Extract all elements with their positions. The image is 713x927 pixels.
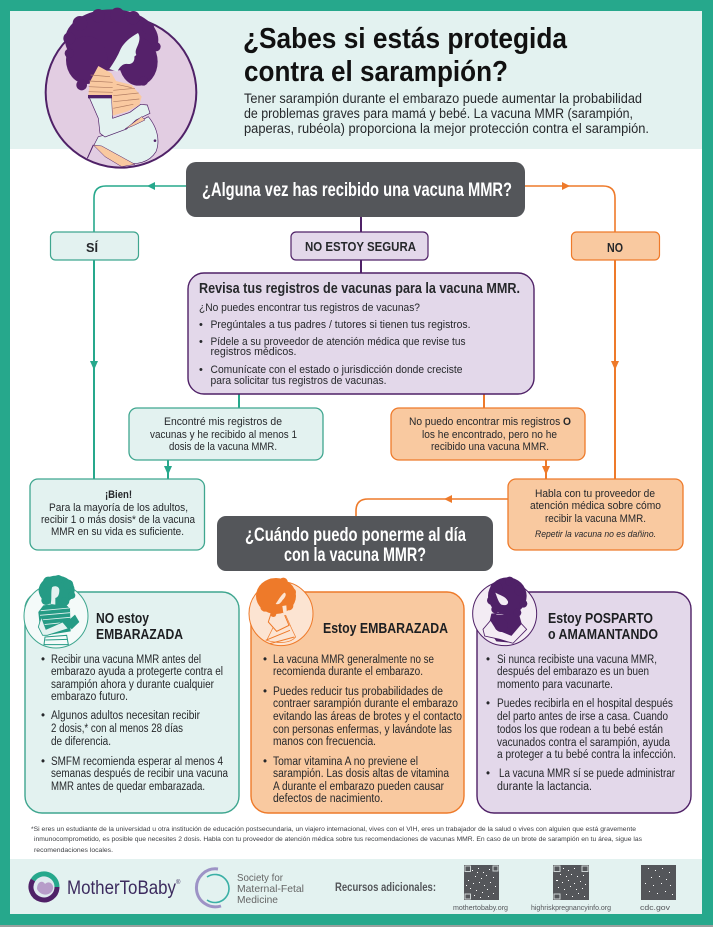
box: habla con tu proveedor <box>508 479 683 550</box>
panel: estoy embarazada: con personas enfermas, y lavándote las <box>273 724 452 736</box>
panel: no estoy embarazada: • <box>41 756 45 768</box>
answer: no estoy segura <box>291 232 428 260</box>
box: records not found: recibido una vacuna MMR. <box>431 441 549 453</box>
QR code: cdc.gov <box>640 865 676 912</box>
panel: no estoy embarazada: • <box>41 710 45 722</box>
footnote: *Si eres un estudiante de la universidad u otra institución de educación postsecundaria, un viajero internacional, vives con el VIH, eres un trabajador de la salud o vives con alguien que está gravemente <box>31 826 636 833</box>
question box: MMR <box>186 162 525 217</box>
panel: no estoy embarazada <box>24 575 239 813</box>
panel: estoy embarazada: evitando las áreas de brotes y el contacto <box>273 711 462 723</box>
panel: no estoy embarazada: EMBARAZADA <box>96 626 183 643</box>
panel: posparto o amamantando: • <box>486 768 490 780</box>
panel: estoy embarazada: Tomar vitamina A no previene el <box>273 756 418 768</box>
panel: estoy embarazada: sarampión. Las dosis altas de vitamina <box>273 768 450 780</box>
panel: estoy embarazada: A durante el embarazo pueden causar <box>273 781 444 793</box>
panel: no estoy embarazada: semanas después de recibir una vacuna <box>51 768 229 780</box>
answer: no <box>572 232 660 260</box>
box: habla con tu proveedor: recibir la vacuna MMR. <box>545 513 646 525</box>
title <box>243 23 568 88</box>
panel: posparto o amamantando: o AMAMANTANDO <box>548 626 658 643</box>
panel: posparto o amamantando: La vacuna MMR sí se puede administrar <box>499 768 675 780</box>
QR code: mothertobaby.org <box>453 865 508 912</box>
icon: woman teal <box>24 575 88 648</box>
panel: no estoy embarazada: de diferencia. <box>51 736 111 748</box>
logo: SMFM: Society for <box>237 872 283 884</box>
panel: estoy embarazada: • <box>263 756 267 768</box>
icon: face <box>109 33 139 72</box>
box: found records: dosis de la vacuna MMR. <box>169 441 277 453</box>
panel: posparto o amamantando: después del embarazo es un buen <box>497 666 649 678</box>
box: records not found: No puedo encontrar mis registros O <box>409 416 571 428</box>
logo: SMFM: Maternal-Fetal <box>237 883 304 895</box>
answer: no estoy segura: NO ESTOY SEGURA <box>305 239 417 254</box>
box: found records <box>129 408 323 460</box>
panel: no estoy embarazada: NO estoy <box>96 610 150 627</box>
title: ¿Sabes si estás protegida <box>243 23 568 55</box>
title: contra el sarampión? <box>244 56 508 88</box>
icon: shirt <box>88 66 142 116</box>
QR code: highriskpregnancyinfo.org: highriskpregnancyinfo.org <box>531 905 611 912</box>
panel: posparto o amamantando: Si nunca recibiste una vacuna MMR, <box>497 654 657 666</box>
panel: posparto o amamantando: • <box>486 698 490 710</box>
icon: woman purple <box>473 577 537 646</box>
panel: estoy embarazada: defectos de nacimiento. <box>273 793 383 805</box>
panel: revisa tus registros: Comunícate con el estado o jurisdicción donde creciste <box>210 364 462 376</box>
box: records not found <box>391 408 585 460</box>
box: bien: recibir 1 o más dosis* de la vacuna <box>41 514 196 526</box>
question box: MMR: ¿Alguna vez has recibido una vacuna MMR? <box>202 180 512 201</box>
panel: posparto o amamantando: todos los que rodean a tu bebé están <box>497 724 663 736</box>
logo: SMFM: Medicine <box>237 894 278 906</box>
panel: estoy embarazada: contraer sarampión durante el embarazo <box>273 698 458 710</box>
panel: estoy embarazada: manos con frecuencia. <box>273 736 376 748</box>
panel: estoy embarazada: • <box>263 686 267 698</box>
footnote: recomendaciones locales. <box>34 847 113 854</box>
arrow: no path <box>356 182 619 516</box>
flow connectors <box>90 182 619 516</box>
panel: revisa tus registros: ¿No puedes encontrar tus registros de vacunas? <box>199 302 420 314</box>
header band <box>10 11 702 149</box>
panel: estoy embarazada: Puedes reducir tus probabilidades de <box>273 686 443 698</box>
panel: revisa tus registros: Pregúntales a tus padres / tutores si tienen tus registros. <box>210 319 470 331</box>
panel: revisa tus registros: • <box>199 319 203 331</box>
panel: no estoy embarazada: SMFM recomienda esperar al menos 4 <box>51 756 224 768</box>
panel: revisa tus registros: registros médicos. <box>210 346 296 358</box>
icon: woman orange <box>249 578 313 646</box>
panel: posparto o amamantando <box>473 577 691 813</box>
panel: revisa tus registros: • <box>199 336 203 348</box>
box: found records: vacunas y he recibido al menos 1 <box>150 429 297 441</box>
panel: revisa tus registros: • <box>199 364 203 376</box>
logo: MotherToBaby: ® <box>176 879 181 886</box>
panel: revisa tus registros <box>188 273 534 394</box>
QR code: cdc.gov: cdc.gov <box>640 905 671 912</box>
panel: no estoy embarazada: • <box>41 654 45 666</box>
panel: revisa tus registros: Pídele a su proveedor de atención médica que revise tus <box>210 336 466 348</box>
panel: no estoy embarazada: sarampión ahora y durante cualquier <box>51 679 214 691</box>
box: records not found: los he encontrado, pero no he <box>422 429 557 441</box>
panel: posparto o amamantando: Puedes recibirla en el hospital después <box>497 698 673 710</box>
panel: estoy embarazada: La vacuna MMR generalmente no se <box>273 654 434 666</box>
panel: estoy embarazada: Estoy EMBARAZADA <box>323 620 448 637</box>
label: recursos adicionales: Recursos adicionales: <box>335 882 436 894</box>
logo: MotherToBaby <box>31 874 181 900</box>
answer: sí <box>50 232 138 260</box>
answer: sí: SÍ <box>86 240 98 255</box>
QR code: mothertobaby.org: mothertobaby.org <box>453 905 508 912</box>
icon: hair <box>63 8 161 90</box>
QR code: highriskpregnancyinfo.org <box>531 865 611 912</box>
panel: posparto o amamantando: vacunados contra el sarampión, ayuda <box>497 737 671 749</box>
panel: no estoy embarazada: 2 dosis,* con al menos 28 días <box>51 723 183 735</box>
panel: posparto o amamantando: durante la lactancia. <box>497 781 592 793</box>
panel: posparto o amamantando: • <box>486 654 490 666</box>
illustration: pregnant woman <box>46 8 196 168</box>
logo: MotherToBaby: MotherToBaby <box>67 878 176 899</box>
panel: estoy embarazada: recomienda durante el embarazo. <box>273 666 423 678</box>
panel: revisa tus registros: Revisa tus registros de vacunas para la vacuna MMR. <box>199 280 520 297</box>
panel: posparto o amamantando: del parto antes de irse a casa. Cuando <box>497 711 668 723</box>
panel: estoy embarazada: • <box>263 654 267 666</box>
panel: no estoy embarazada: Algunos adultos necesitan recibir <box>51 710 200 722</box>
intro text: paperas, rubéola) proporciona la mejor protección contra el sarampión. <box>244 121 649 136</box>
panel: no estoy embarazada: embarazo futuro. <box>51 691 128 703</box>
arrow: yes path <box>90 182 239 479</box>
footer band <box>10 859 702 914</box>
box: bien <box>30 479 204 550</box>
logo: SMFM <box>196 869 304 907</box>
box: habla con tu proveedor: Repetir la vacuna no es dañino. <box>535 529 656 540</box>
question box: cuándo: ¿Cuándo puedo ponerme al día <box>245 525 466 546</box>
panel: estoy embarazada <box>249 578 464 813</box>
box: bien: MMR en su vida es suficiente. <box>51 526 184 538</box>
panel: revisa tus registros: para solicitar tus registros de vacunas. <box>210 375 386 387</box>
box: bien: Para la mayoría de los adultos, <box>49 502 188 514</box>
answer: no: NO <box>607 240 623 255</box>
panel: posparto o amamantando: Estoy POSPARTO <box>548 610 653 627</box>
box: bien: ¡Bien! <box>105 489 132 501</box>
intro text <box>244 91 649 136</box>
intro text: Tener sarampión durante el embarazo puede aumentar la probabilidad <box>244 91 642 106</box>
intro text: de problemas graves para mamá y bebé. La vacuna MMR (sarampión, <box>244 106 633 121</box>
footnote: inmunocomprometido, es posible que necesites 2 dosis. Habla con tu proveedor de atención médica sobre tus recomendaciones de vacunas MMR. En caso de un brote de sarampión en tu área, sigue las <box>34 836 643 843</box>
box: habla con tu proveedor: Habla con tu proveedor de <box>535 488 655 500</box>
box: found records: Encontré mis registros de <box>164 416 282 428</box>
question box: cuándo: con la vacuna MMR? <box>284 545 426 566</box>
panel: no estoy embarazada: embarazo ayuda a protegerte contra el <box>51 666 223 678</box>
panel: posparto o amamantando: momento para vacunarte. <box>497 679 613 691</box>
panel: no estoy embarazada: MMR antes de quedar embarazada. <box>51 781 205 793</box>
panel: no estoy embarazada: Recibir una vacuna MMR antes del <box>51 654 201 666</box>
panel: posparto o amamantando: a proteger a tu bebé contra la infección. <box>497 749 676 761</box>
question box: cuándo <box>217 516 493 571</box>
box: habla con tu proveedor: atención médica sobre cómo <box>530 500 661 512</box>
icon: belly and arm <box>87 98 158 167</box>
footnote <box>31 826 643 854</box>
